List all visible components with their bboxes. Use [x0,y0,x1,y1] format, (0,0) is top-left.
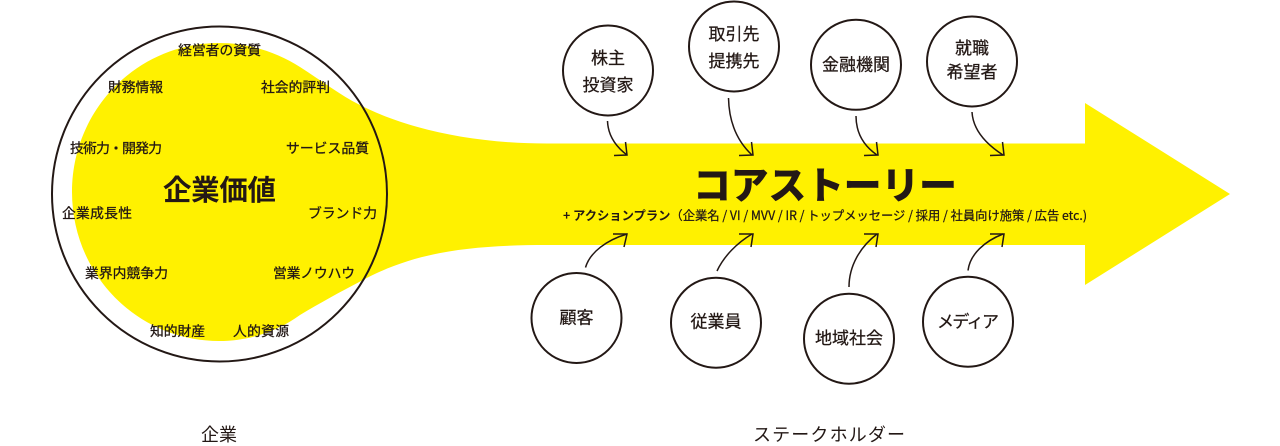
label: technology and development: 技術力・開発力 [70,137,162,157]
arrow: financial institutions to story [856,116,878,156]
stakeholder: business partners: 取引先 [708,20,760,45]
arrow: media to story [968,234,1004,270]
stakeholder: local community [804,294,894,384]
arrow: shareholders to story [608,121,627,156]
stakeholder: shareholders: 株主 [591,44,625,69]
label: management quality: 経営者の資質 [178,39,261,59]
subheading: action plan: + アクションプラン（企業名 / VI / MVV / IR / トップメッセージ / 採用 / 社員向け施策 / 広告 etc.) [563,205,1087,224]
heading: core story: コアストーリー [693,155,957,210]
stakeholder: customers [532,273,622,363]
label: competitiveness: 業界内競争力 [85,262,168,282]
label: company growth: 企業成長性 [62,202,132,222]
stakeholder: business partners [689,2,779,92]
label: financial information: 財務情報 [108,76,163,96]
arrow: partners to story [728,98,753,156]
stakeholder: financial institutions [811,20,901,110]
stakeholder: media: メディア [937,308,999,332]
stakeholder: business partners: 提携先 [708,47,760,72]
label: social reputation: 社会的評判 [261,76,330,96]
label: sales know-how: 営業ノウハウ [273,262,355,282]
label: intellectual property: 知的財産 [150,320,205,340]
label: service quality: サービス品質 [286,137,369,157]
arrow: job seekers to story [972,112,1004,156]
stakeholder: media [923,277,1013,367]
company value circle [52,26,387,362]
stakeholder: job seekers [927,16,1017,106]
heading: company value: 企業価値 [163,168,276,209]
label: human resources: 人的資源 [233,320,289,340]
arrow: community to story [849,234,878,287]
stakeholder: shareholders [563,26,653,116]
arrow: employees to story [717,234,753,271]
stakeholder: shareholders: 投資家 [582,71,634,96]
stakeholder: job seekers: 就職 [955,34,989,59]
stakeholder: financial institutions: 金融機関 [822,50,890,76]
yellow arrow and value funnel [72,43,1230,341]
stakeholder: customers: 顧客 [560,304,594,328]
stakeholder: local community: 地域社会 [815,324,883,349]
arrow: customers to story [586,234,627,268]
stakeholder: job seekers: 希望者 [946,58,998,83]
label: brand power: ブランド力 [308,202,377,222]
stakeholder: employees: 従業員 [690,308,742,332]
stakeholder: employees [671,278,761,368]
